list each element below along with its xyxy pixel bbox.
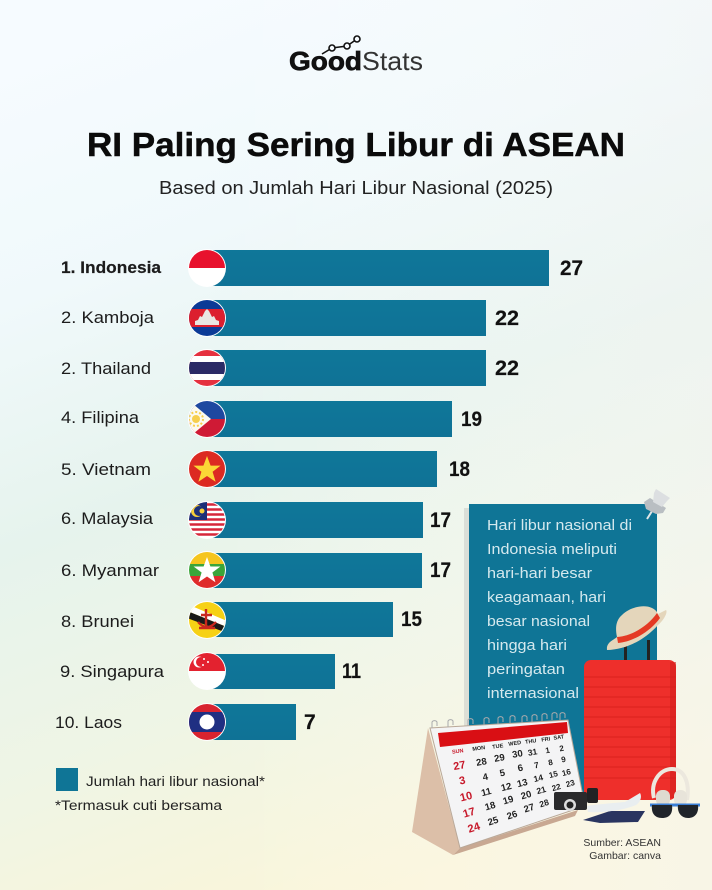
subtitle: Based on Jumlah Hari Libur Nasional (2025) — [159, 178, 553, 198]
row: Singapura: 11 — [342, 660, 361, 683]
row: Laos: 10. Laos — [55, 713, 122, 732]
bar chart: national holidays by country — [55, 249, 583, 741]
icon: headphones — [653, 769, 688, 806]
calendar dates: 11 — [480, 786, 493, 799]
calendar dates: 3 — [458, 775, 467, 788]
row: Indonesia: 1. Indonesia — [61, 258, 162, 277]
calendar dates: 18 — [484, 800, 497, 813]
calendar weekdays: WED — [508, 740, 522, 748]
calendar dates: 7 — [533, 760, 540, 770]
calendar dates: 30 — [511, 748, 524, 761]
calendar dates: 14 — [532, 772, 544, 784]
row: Filipina: 19 — [461, 408, 482, 431]
calendar dates: 10 — [459, 790, 474, 804]
calendar weekdays: SUN — [452, 748, 464, 756]
callout panel: peringatan — [487, 661, 565, 678]
callout panel: hingga hari — [487, 637, 567, 654]
calendar dates: 15 — [548, 769, 559, 780]
row: Brunei — [61, 601, 422, 639]
row: Malaysia: 6. Malaysia — [61, 509, 154, 528]
row: Malaysia — [61, 501, 451, 539]
calendar dates: 4 — [482, 771, 490, 783]
row: Vietnam: 5. Vietnam — [61, 460, 151, 479]
title: RI Paling Sering Libur di ASEAN — [87, 126, 625, 163]
row: Filipina: 4. Filipina — [61, 408, 140, 427]
callout panel — [464, 504, 657, 794]
row: Laos — [55, 703, 316, 741]
source credit: Sumber: ASEAN — [583, 837, 661, 849]
calendar dates: 5 — [499, 767, 507, 779]
icon: suitcase — [584, 640, 676, 800]
icon: camera — [554, 788, 598, 811]
calendar dates: 27 — [522, 802, 536, 815]
calendar dates: 8 — [547, 758, 554, 767]
row: Brunei: 8. Brunei — [61, 612, 134, 631]
calendar dates: 31 — [527, 746, 538, 758]
calendar dates: 13 — [516, 777, 529, 790]
callout panel: Hari libur nasional di — [487, 517, 632, 534]
calendar weekdays — [452, 734, 565, 756]
calendar weekdays: FRI — [541, 736, 551, 744]
row: Thailand: 2. Thailand — [61, 359, 151, 378]
row: Laos: 7 — [304, 711, 316, 734]
row: Singapura: 9. Singapura — [60, 662, 165, 681]
calendar dates: 28 — [475, 756, 488, 769]
row: Kamboja: 2. Kamboja — [61, 308, 155, 327]
source credit — [583, 837, 661, 862]
calendar dates: 27 — [452, 759, 467, 773]
calendar dates: 21 — [535, 784, 547, 796]
callout panel: Indonesia meliputi — [487, 541, 617, 558]
calendar dates: 19 — [502, 794, 515, 807]
row: Indonesia: 27 — [560, 257, 583, 280]
icon: sunglasses — [650, 805, 700, 818]
row: Filipina — [61, 399, 482, 439]
legend: *Termasuk cuti bersama — [55, 797, 222, 813]
calendar dates: 22 — [551, 782, 562, 793]
icon: straw hat — [607, 606, 667, 650]
row: Thailand — [61, 349, 519, 387]
legend: Jumlah hari libur nasional* — [86, 773, 266, 789]
callout panel: besar nasional — [487, 613, 590, 630]
calendar dates: 26 — [505, 809, 519, 822]
calendar dates: 17 — [462, 806, 477, 821]
icon: airplane and passport — [583, 793, 645, 823]
row: Kamboja: 22 — [495, 307, 519, 330]
callout panel: internasional — [487, 685, 579, 702]
icon: desk calendar — [412, 713, 585, 855]
callout panel: keagamaan, hari — [487, 589, 606, 606]
legend — [55, 768, 266, 813]
logo: GoodStats — [289, 36, 423, 76]
callout panel: hari-hari besar — [487, 565, 592, 582]
calendar dates: 1 — [545, 746, 551, 755]
calendar dates: 2 — [559, 744, 565, 753]
calendar weekdays: THU — [525, 738, 537, 746]
row: Kamboja — [61, 299, 519, 337]
icon: push pin — [644, 489, 670, 519]
row: Singapura — [60, 652, 361, 690]
calendar dates: 29 — [493, 752, 506, 765]
row: Myanmar: 17 — [430, 559, 451, 582]
calendar dates: 24 — [466, 820, 483, 836]
calendar weekdays: MON — [472, 745, 486, 753]
calendar dates: 25 — [486, 815, 501, 828]
calendar weekdays: SAT — [553, 734, 565, 742]
calendar dates: 23 — [565, 778, 576, 789]
row: Thailand: 22 — [495, 357, 519, 380]
logo: GoodStats: Good — [289, 46, 362, 76]
calendar dates: 9 — [560, 755, 567, 764]
logo: GoodStats: Stats — [362, 46, 423, 76]
source credit: Gambar: canva — [589, 850, 661, 862]
calendar dates — [452, 744, 576, 836]
row: Brunei: 15 — [401, 608, 422, 631]
row: Vietnam: 18 — [449, 458, 470, 481]
calendar dates: 20 — [520, 789, 533, 802]
row: Indonesia — [61, 249, 583, 287]
calendar dates: 6 — [517, 763, 524, 774]
row: Myanmar: 6. Myanmar — [61, 561, 159, 580]
calendar dates: 16 — [561, 767, 572, 778]
row: Malaysia: 17 — [430, 509, 451, 532]
row: Myanmar — [61, 551, 451, 589]
calendar dates: 28 — [538, 797, 550, 809]
calendar dates: 12 — [500, 781, 513, 794]
row: Vietnam — [61, 450, 470, 488]
calendar weekdays: TUE — [492, 743, 504, 751]
